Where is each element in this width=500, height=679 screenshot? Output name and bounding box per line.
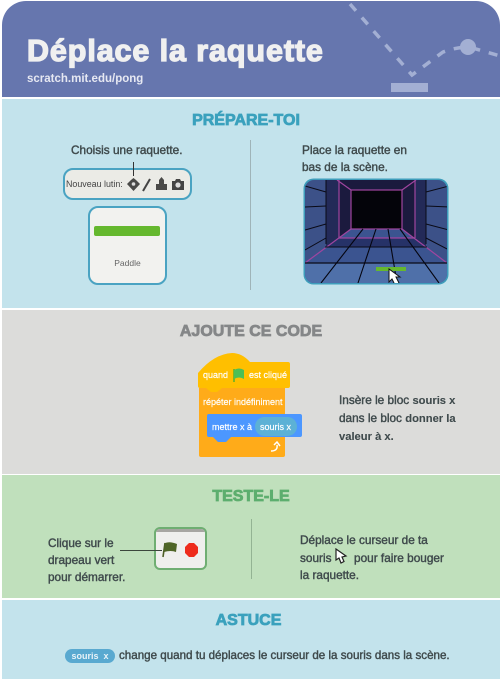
heading: tip: ASTUCE bbox=[216, 612, 281, 629]
panel: tip bbox=[2, 600, 500, 679]
instruction: insert block bbox=[339, 393, 456, 443]
panel: test bbox=[2, 475, 500, 598]
instruction: click flag: drapeau vert bbox=[48, 553, 114, 567]
instruction: place paddle: Place la raquette en bbox=[302, 143, 407, 157]
panel: header bbox=[2, 1, 500, 97]
icon: green flag bbox=[234, 368, 244, 382]
green paddle bbox=[94, 226, 160, 236]
instruction: place paddle bbox=[302, 143, 407, 174]
stage screenshot bbox=[304, 178, 448, 284]
block text: set x: mettre x à bbox=[212, 422, 252, 432]
block text: clicked: est cliqué bbox=[249, 370, 287, 380]
block text: when flag clicked: quand bbox=[203, 370, 228, 380]
repeat block body bbox=[199, 388, 285, 457]
instruction: insert block: valeur à x. bbox=[339, 431, 394, 443]
toolbar label: Nouveau lutin: bbox=[66, 179, 123, 189]
instruction: move cursor: la raquette. bbox=[300, 568, 359, 582]
instruction: move cursor bbox=[300, 533, 444, 582]
leader line to sprite icon bbox=[133, 162, 134, 176]
reporter pill: mouse x bbox=[65, 649, 115, 663]
block text: mouse x: souris x bbox=[260, 422, 291, 432]
icon: flag and stop bbox=[162, 542, 198, 558]
new sprite toolbar bbox=[63, 168, 192, 200]
sprite name: Paddle bbox=[114, 258, 141, 268]
instruction: insert block: Insère le bloc souris x bbox=[339, 393, 455, 407]
block text: forever: répéter indéfiniment bbox=[203, 397, 283, 407]
heading: test: TESTE-LE bbox=[212, 488, 290, 505]
icon: ball trajectory and paddle bbox=[348, 3, 498, 92]
instruction: choose paddle: Choisis une raquette. bbox=[71, 143, 182, 157]
instruction: move cursor: Déplace le curseur de ta bbox=[300, 533, 428, 547]
panel: prepare bbox=[2, 99, 500, 308]
icon: cursor bbox=[335, 548, 348, 564]
instruction: place paddle: bas de la scène. bbox=[302, 160, 388, 174]
heading: code: AJOUTE CE CODE bbox=[180, 323, 322, 340]
panel: code bbox=[2, 310, 500, 474]
title: Déplace la raquette bbox=[27, 34, 324, 68]
instruction: insert block: dans le bloc donner la bbox=[339, 411, 456, 425]
subtitle url: scratch.mit.edu/pong bbox=[27, 73, 143, 85]
instruction: click flag: pour démarrer. bbox=[48, 570, 125, 584]
heading: prepare: PRÉPARE-TOI bbox=[192, 112, 300, 129]
stage controls bbox=[154, 527, 207, 570]
instruction: move cursor: souris pour faire bouger bbox=[300, 550, 444, 564]
scratch code blocks bbox=[198, 353, 302, 457]
hat block bbox=[198, 353, 290, 392]
toolbar icons bbox=[127, 177, 184, 192]
set x block bbox=[207, 414, 302, 442]
instruction: click flag bbox=[48, 536, 125, 584]
reporter pill bbox=[255, 417, 297, 436]
tip text: change quand tu déplaces le curseur de la souris dans la scène. bbox=[119, 649, 450, 662]
icon: loop arrow bbox=[271, 442, 280, 451]
reporter pill: mouse x: souris x bbox=[71, 651, 108, 661]
sprite card: paddle bbox=[88, 206, 167, 285]
instruction: click flag: Clique sur le bbox=[48, 536, 114, 550]
icon: mouse cursor bbox=[389, 269, 400, 285]
leader line to flag bbox=[120, 550, 162, 551]
